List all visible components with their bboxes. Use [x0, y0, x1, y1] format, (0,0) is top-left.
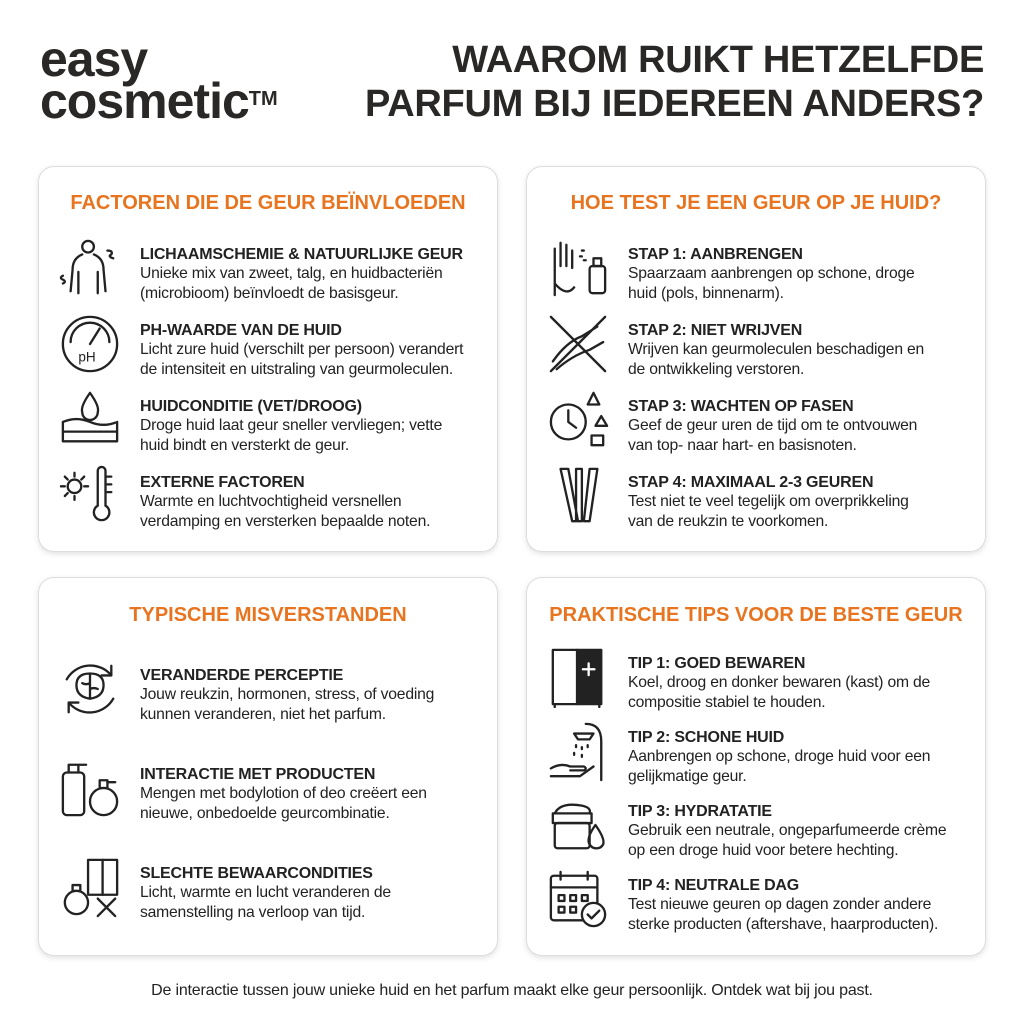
item: stap 1: huid (pols, binnenarm).: [628, 285, 784, 302]
item: interactie: [62, 764, 427, 822]
item: perceptie: kunnen veranderen, niet het parfum.: [140, 706, 386, 723]
item: huidconditie: Droge huid laat geur sneller vervliegen; vette: [140, 417, 442, 434]
item: stap 4: [559, 468, 909, 530]
icon: calendar check: [550, 870, 606, 928]
item: ph: [62, 316, 464, 378]
icon: sun thermometer: [60, 466, 112, 522]
heading: tips: PRAKTISCHE TIPS VOOR DE BESTE GEUR: [549, 604, 963, 626]
item: stap 3: Geef de geur uren de tijd om te ontvouwen: [628, 417, 917, 434]
icon: brain cycle: [66, 664, 114, 714]
item: tip 1: TIP 1: GOED BEWAREN: [628, 655, 805, 672]
icon: test strips: [559, 468, 599, 522]
item: stap 2: [550, 316, 924, 378]
item: tip 4: TIP 4: NEUTRALE DAG: [628, 877, 799, 894]
heading: test: HOE TEST JE EEN GEUR OP JE HUID?: [571, 192, 941, 214]
footer: De interactie tussen jouw unieke huid en het parfum maakt elke geur persoonlijk. Ontdek wat bij jou past.: [151, 982, 873, 999]
item: stap 3: [550, 392, 917, 454]
item: lichaamschemie: (microbioom) beïnvloedt de basisgeur.: [140, 285, 399, 302]
item: interactie: INTERACTIE MET PRODUCTEN: [140, 766, 375, 783]
item: tip 1: [552, 648, 930, 711]
icon: products: [62, 764, 118, 816]
item: tip 2: gelijkmatige geur.: [628, 768, 746, 785]
item: externe: [60, 466, 430, 530]
item: bewaarcondities: Licht, warmte en lucht veranderen de: [140, 884, 391, 901]
logo: easy: [40, 31, 147, 87]
item: interactie: Mengen met bodylotion of deo creëert een: [140, 785, 427, 802]
logo: cosmeticTM: [40, 73, 278, 129]
item: huidconditie: huid bindt en versterkt de geur.: [140, 437, 349, 454]
item: bewaarcondities: SLECHTE BEWAARCONDITIES: [140, 865, 373, 882]
item: ph: PH-WAARDE VAN DE HUID: [140, 322, 342, 339]
item: tip 3: op een droge huid voor betere hechting.: [628, 842, 898, 859]
item: bewaarcondities: samenstelling na verloop van tijd.: [140, 904, 365, 921]
item: tip 2: TIP 2: SCHONE HUID: [628, 729, 784, 746]
item: externe: verdamping en versterken bepaalde noten.: [140, 513, 430, 530]
icon: skin drop: [62, 392, 118, 442]
item: stap 1: STAP 1: AANBRENGEN: [628, 246, 803, 263]
item: stap 1: [554, 242, 915, 302]
logo: [40, 31, 278, 129]
item: tip 4: Test nieuwe geuren op dagen zonder andere: [628, 896, 931, 913]
item: stap 4: van de reukzin te voorkomen.: [628, 513, 828, 530]
item: stap 1: Spaarzaam aanbrengen op schone, droge: [628, 265, 915, 282]
panel: factoren: [38, 166, 498, 552]
item: stap 4: STAP 4: MAXIMAAL 2-3 GEUREN: [628, 474, 873, 491]
item: ph: Licht zure huid (verschilt per persoon) verandert: [140, 341, 463, 358]
item: huidconditie: [62, 392, 442, 454]
icon: cabinet: [552, 648, 602, 708]
item: bewaarcondities: [64, 858, 391, 921]
icon: ph gauge: [62, 316, 118, 372]
icon: no rubbing: [550, 316, 606, 372]
item: stap 3: van top- naar hart- en basisnoten.: [628, 437, 857, 454]
item: huidconditie: HUIDCONDITIE (VET/DROOG): [140, 398, 362, 415]
item: perceptie: [66, 664, 434, 723]
item: stap 2: de ontwikkeling verstoren.: [628, 361, 804, 378]
item: tip 4: [550, 870, 938, 933]
heading: misverstanden: TYPISCHE MISVERSTANDEN: [129, 604, 407, 626]
panel: misverstanden: [38, 577, 498, 956]
panel: test: [526, 166, 986, 552]
item: stap 4: Test niet te veel tegelijk om overprikkeling: [628, 493, 909, 510]
item: stap 3: STAP 3: WACHTEN OP FASEN: [628, 398, 853, 415]
item: tip 4: sterke producten (aftershave, haarproducten).: [628, 916, 938, 933]
item: tip 2: Aanbrengen op schone, droge huid voor een: [628, 748, 930, 765]
item: ph: de intensiteit en uitstraling van geurmoleculen.: [140, 361, 453, 378]
item: lichaamschemie: [60, 240, 463, 302]
item: lichaamschemie: LICHAAMSCHEMIE & NATUURLIJKE GEUR: [140, 246, 463, 263]
title: PARFUM BIJ IEDEREEN ANDERS?: [365, 83, 984, 125]
item: tip 2: [550, 722, 930, 785]
heading: factoren: FACTOREN DIE DE GEUR BEÏNVLOEDEN: [70, 192, 466, 214]
icon: hand spray: [554, 242, 606, 296]
icon: bottle window: [64, 858, 118, 918]
item: interactie: nieuwe, onbedoelde geurcombinatie.: [140, 805, 390, 822]
icon: clock phases: [550, 392, 608, 446]
item: externe: EXTERNE FACTOREN: [140, 474, 305, 491]
item: perceptie: VERANDERDE PERCEPTIE: [140, 667, 343, 684]
item: lichaamschemie: Unieke mix van zweet, talg, en huidbacteriën: [140, 265, 443, 282]
item: externe: Warmte en luchtvochtigheid versnellen: [140, 493, 401, 510]
icon: cream jar: [552, 804, 605, 850]
item: tip 3: Gebruik een neutrale, ongeparfumeerde crème: [628, 822, 946, 839]
panel: tips: [526, 577, 986, 956]
item: tip 3: [552, 803, 946, 859]
icon: body: [60, 240, 114, 294]
item: tip 1: Koel, droog en donker bewaren (kast) om de: [628, 674, 930, 691]
item: stap 2: STAP 2: NIET WRIJVEN: [628, 322, 802, 339]
icon: ph gauge: pH: [78, 349, 96, 364]
item: perceptie: Jouw reukzin, hormonen, stress, of voeding: [140, 686, 434, 703]
title: WAAROM RUIKT HETZELFDE: [452, 39, 984, 81]
item: tip 3: TIP 3: HYDRATATIE: [628, 803, 772, 820]
item: tip 1: compositie stabiel te houden.: [628, 694, 825, 711]
title: [365, 39, 984, 125]
icon: shower hand: [550, 722, 602, 782]
item: stap 2: Wrijven kan geurmoleculen beschadigen en: [628, 341, 924, 358]
